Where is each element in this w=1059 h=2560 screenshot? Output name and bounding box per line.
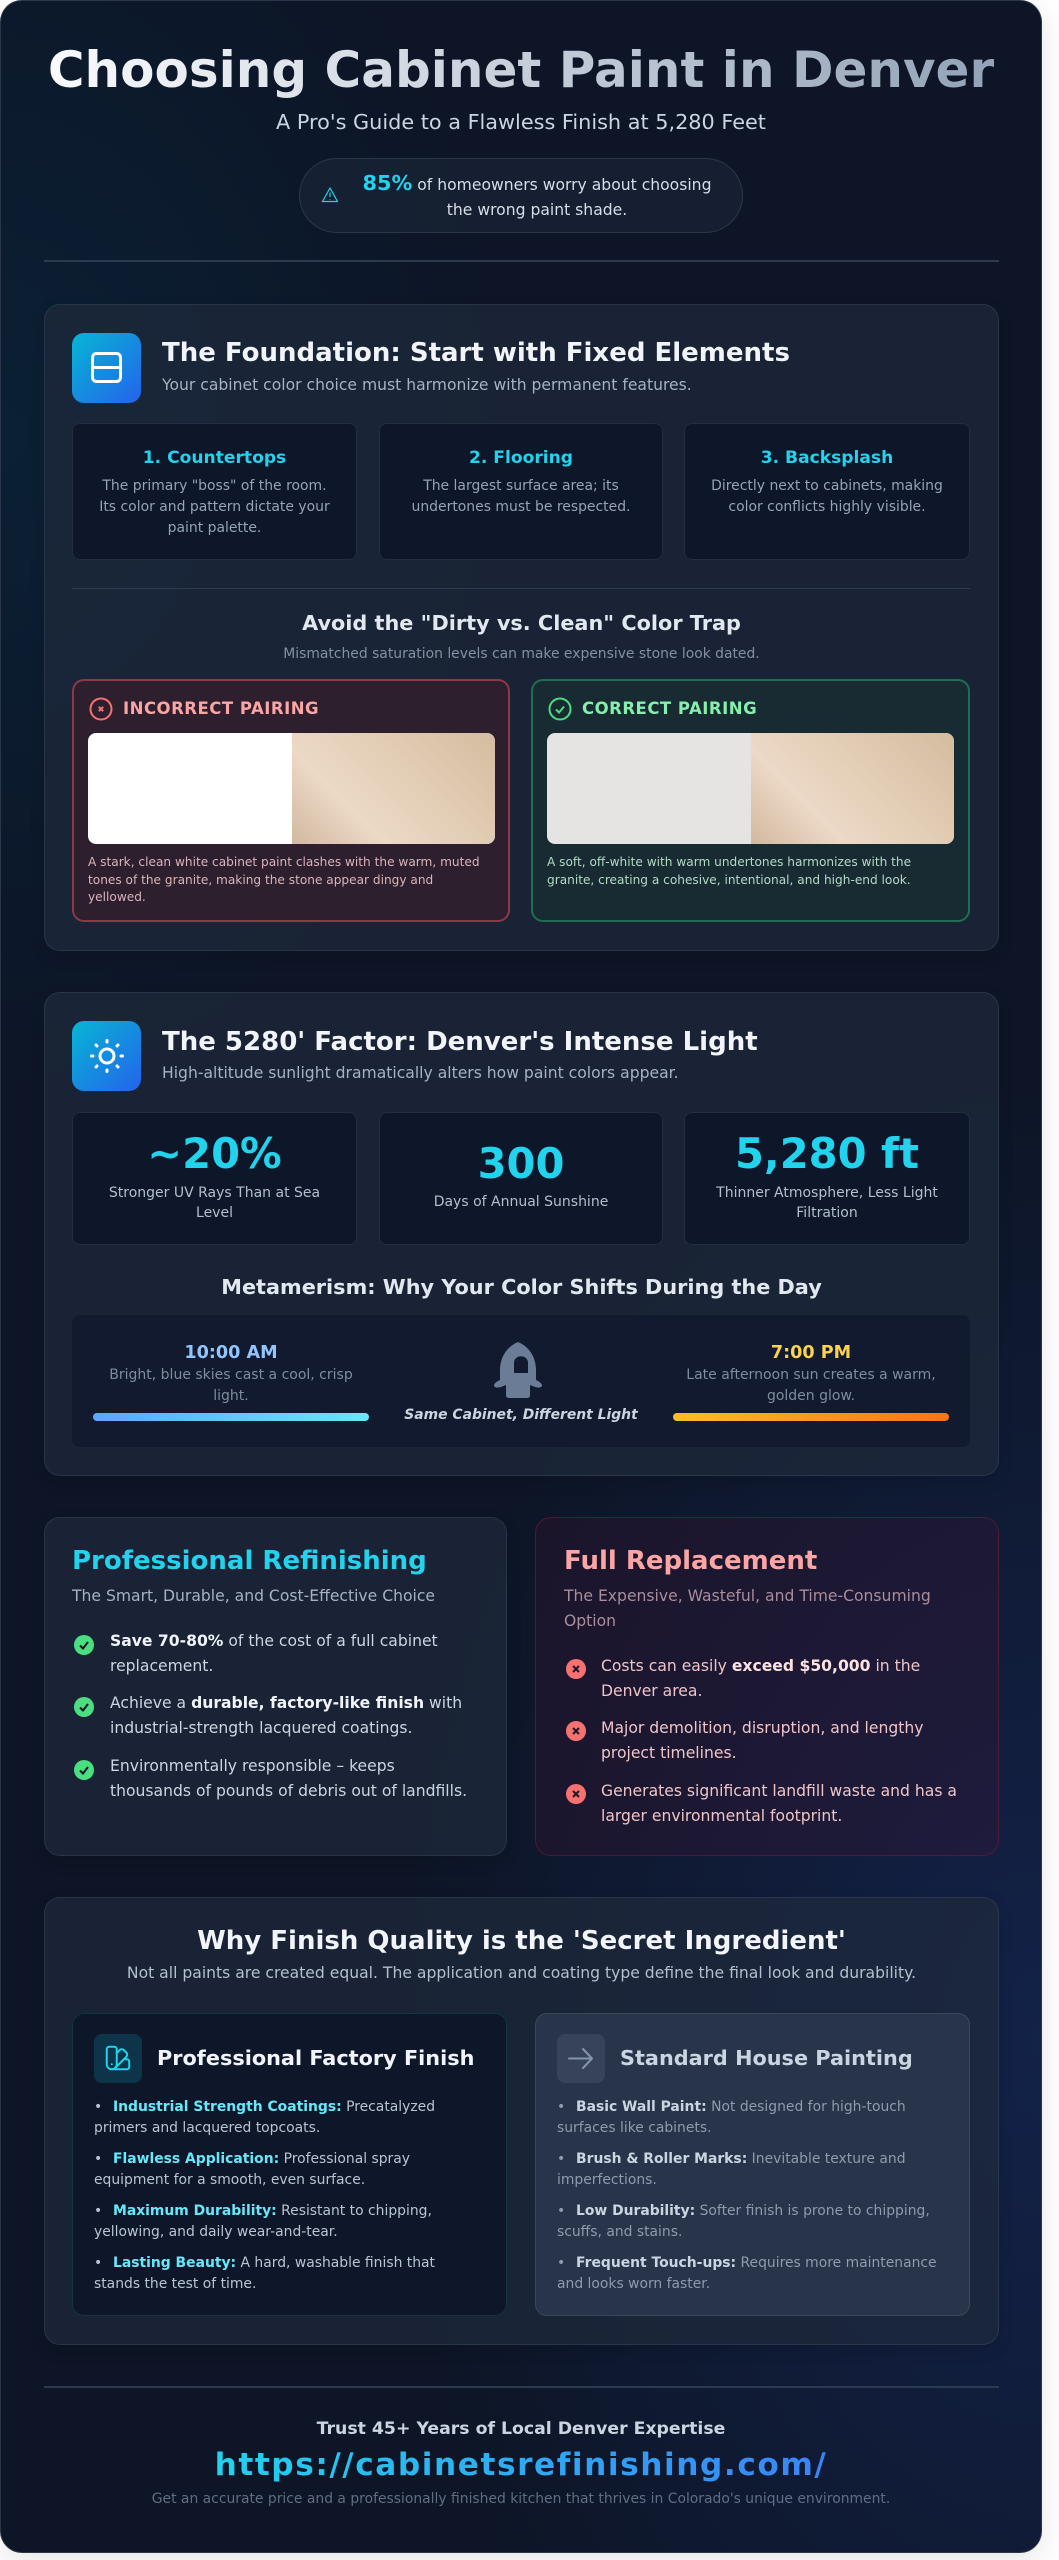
subheading: Not all paints are created equal. The application and coating type define the final look and durability. bbox=[127, 1964, 916, 1982]
label: Stronger UV Rays Than at Sea bbox=[109, 1184, 320, 1200]
title: Choosing Cabinet Paint in Denver bbox=[48, 41, 994, 99]
panel: finish quality bbox=[44, 1897, 999, 2345]
drawback: disruption bbox=[601, 1719, 923, 1762]
list item bbox=[557, 2098, 906, 2136]
card title: 2. Flooring bbox=[469, 448, 573, 468]
bar: cool light bbox=[93, 1413, 369, 1421]
stat: UV bbox=[72, 1112, 357, 1245]
card title: 3. Backsplash bbox=[761, 448, 893, 468]
icon: check bbox=[74, 1760, 94, 1780]
list item bbox=[94, 2202, 432, 2240]
list item: • bbox=[94, 2150, 102, 2166]
list item: • bbox=[94, 2098, 102, 2114]
evening description: Late afternoon sun creates a warm, bbox=[686, 1366, 936, 1382]
description: A stark, clean white cabinet paint clashes with the warm, muted bbox=[88, 855, 480, 869]
list item: Low Durability: Softer finish is prone to chipping, bbox=[576, 2202, 930, 2218]
label: Days of Annual Sunshine bbox=[434, 1194, 608, 1210]
list item: • bbox=[94, 2254, 102, 2270]
card text bbox=[99, 478, 330, 536]
list item: and looks worn faster. bbox=[557, 2276, 710, 2292]
list item bbox=[94, 2254, 435, 2292]
footer: trust line: Trust 45+ Years of Local Denver Expertise bbox=[317, 2419, 725, 2439]
list item: scuffs, and stains. bbox=[557, 2224, 682, 2240]
list item: Lasting Beauty: A hard, washable finish that bbox=[113, 2254, 435, 2270]
benefit: savings: replacement. bbox=[110, 1656, 213, 1674]
icon: check bbox=[74, 1697, 94, 1717]
icon: check circle bbox=[548, 698, 572, 720]
title: Standard House Painting bbox=[620, 2046, 913, 2070]
stat text bbox=[363, 171, 711, 219]
card text: The primary "boss" of the room. bbox=[102, 478, 327, 494]
icon: cabinet bbox=[72, 333, 141, 403]
card text: paint palette. bbox=[168, 520, 261, 536]
subheading bbox=[564, 1587, 931, 1630]
subheading: High-altitude sunlight dramatically alters how paint colors appear. bbox=[162, 1064, 679, 1082]
list item: • bbox=[557, 2150, 565, 2166]
list item: • bbox=[557, 2098, 565, 2114]
benefit: environment bbox=[110, 1757, 467, 1800]
evening description bbox=[686, 1366, 936, 1404]
label: Level bbox=[196, 1205, 233, 1221]
number: 300 bbox=[478, 1139, 564, 1188]
list item: equipment for a smooth, even surface. bbox=[94, 2172, 365, 2188]
icon: warning triangle bbox=[322, 187, 338, 202]
list item: Industrial Strength Coatings: Precatalyzed bbox=[113, 2098, 435, 2114]
label: Thinner Atmosphere, Less Light bbox=[716, 1184, 938, 1200]
list item: stands the test of time. bbox=[94, 2276, 256, 2292]
list item: imperfections. bbox=[557, 2172, 657, 2188]
heading: Why Finish Quality is the 'Secret Ingredient' bbox=[197, 1926, 846, 1956]
drawback: waste bbox=[601, 1782, 957, 1824]
bar: warm light bbox=[673, 1413, 949, 1421]
time label: morning: 10:00 AM bbox=[184, 1343, 278, 1363]
swatch comparison bbox=[547, 733, 954, 844]
benefit: durability: industrial-strength lacquered coatings. bbox=[110, 1718, 412, 1736]
heading: metamerism: Metamerism: Why Your Color Shifts During the Day bbox=[221, 1275, 822, 1299]
list item bbox=[94, 2098, 435, 2136]
card: flooring bbox=[379, 423, 663, 560]
list item: Flawless Application: Professional spray bbox=[113, 2150, 410, 2166]
panel: professional refinishing bbox=[44, 1517, 507, 1856]
description bbox=[88, 855, 480, 904]
subheading: The Smart, Durable, and Cost-Effective Choice bbox=[72, 1587, 435, 1605]
drawback: waste: Generates significant landfill waste and has a bbox=[601, 1782, 957, 1800]
heading: The 5280' Factor: Denver's Intense Light bbox=[162, 1027, 758, 1057]
card text: The largest surface area; its bbox=[423, 478, 619, 494]
swatch comparison bbox=[88, 733, 495, 844]
heading: Professional Refinishing bbox=[72, 1546, 427, 1576]
list item bbox=[557, 2150, 906, 2188]
list item bbox=[557, 2254, 937, 2292]
heading: Full Replacement bbox=[564, 1546, 817, 1576]
morning description: Bright, blue skies cast a cool, crisp bbox=[109, 1366, 353, 1382]
list item: Brush & Roller Marks: Inevitable texture and bbox=[576, 2150, 906, 2166]
list item: • bbox=[557, 2202, 565, 2218]
list item bbox=[557, 2202, 930, 2240]
list item: Maximum Durability: Resistant to chipping, bbox=[113, 2202, 432, 2218]
card: countertops bbox=[72, 423, 357, 560]
card title: 1. Countertops bbox=[143, 448, 286, 468]
panel: factory finish bbox=[72, 2013, 507, 2316]
subheading: The Expensive, Wasteful, and Time-Consuming bbox=[564, 1587, 931, 1605]
card text: Directly next to cabinets, making bbox=[711, 478, 943, 494]
panel: day comparison bbox=[72, 1315, 970, 1447]
benefit: durability bbox=[110, 1694, 462, 1736]
stat text: the wrong paint shade. bbox=[447, 201, 627, 219]
list item: • bbox=[557, 2254, 565, 2270]
benefit: savings bbox=[110, 1632, 438, 1674]
heading: color trap: Avoid the "Dirty vs. Clean" Color Trap bbox=[302, 611, 741, 635]
subheading: color trap: Mismatched saturation levels can make expensive stone look dated. bbox=[283, 646, 760, 662]
drawback: disruption: project timelines. bbox=[601, 1744, 737, 1762]
morning description bbox=[109, 1366, 353, 1404]
stat: altitude bbox=[684, 1112, 970, 1245]
stat: sunshine bbox=[379, 1112, 663, 1245]
card text: undertones must be respected. bbox=[412, 499, 630, 515]
icon: check bbox=[74, 1635, 94, 1655]
evening description: golden glow. bbox=[767, 1388, 855, 1404]
list item: surfaces like cabinets. bbox=[557, 2120, 712, 2136]
heading: The Foundation: Start with Fixed Elements bbox=[162, 338, 790, 368]
description: A soft, off-white with warm undertones harmonizes with the bbox=[547, 855, 911, 869]
icon: cabinet silhouette bbox=[494, 1342, 542, 1398]
label: INCORRECT PAIRING bbox=[123, 699, 319, 718]
description: granite, creating a cohesive, intentional, and high-end look. bbox=[547, 872, 911, 886]
subheading: Your cabinet color choice must harmonize with permanent features. bbox=[162, 376, 692, 394]
list item: yellowing, and daily wear-and-tear. bbox=[94, 2224, 338, 2240]
icon: arrow bbox=[557, 2034, 605, 2083]
list item: Frequent Touch-ups: Requires more maintenance bbox=[576, 2254, 937, 2270]
drawback: cost: Costs can easily exceed $50,000 in the bbox=[601, 1657, 920, 1675]
drawback: cost bbox=[601, 1657, 920, 1700]
card text: Its color and pattern dictate your bbox=[99, 499, 330, 515]
time label: evening: 7:00 PM bbox=[771, 1343, 851, 1363]
subtitle: A Pro's Guide to a Flawless Finish at 5,280 Feet bbox=[276, 110, 766, 134]
stat text: 85% of homeowners worry about choosing bbox=[363, 171, 711, 195]
card text: color conflicts highly visible. bbox=[728, 499, 926, 515]
benefit: environment: Environmentally responsible – keeps bbox=[110, 1757, 395, 1775]
panel: house painting bbox=[535, 2013, 970, 2316]
description bbox=[547, 855, 911, 886]
icon: x bbox=[566, 1784, 586, 1804]
drawback: cost: Denver area. bbox=[601, 1682, 702, 1700]
panel: the foundation bbox=[44, 304, 999, 951]
icon: x bbox=[566, 1721, 586, 1741]
icon: x bbox=[566, 1659, 586, 1679]
label bbox=[109, 1184, 320, 1221]
footer: url: https://cabinetsrefinishing.com/ bbox=[215, 2447, 827, 2483]
subheading: Option bbox=[564, 1612, 616, 1630]
list item: Basic Wall Paint: Not designed for high-touch bbox=[576, 2098, 906, 2114]
benefit: environment: thousands of pounds of debris out of landfills. bbox=[110, 1782, 467, 1800]
drawback: disruption: Major demolition, disruption, and lengthy bbox=[601, 1719, 923, 1737]
title: Professional Factory Finish bbox=[157, 2046, 474, 2070]
card text bbox=[711, 478, 943, 515]
footer: closing note: Get an accurate price and a professionally finished kitchen that thrives in Colorado's unique environment. bbox=[152, 2491, 890, 2507]
panel: correct pairing bbox=[531, 679, 970, 922]
description: yellowed. bbox=[88, 890, 146, 904]
label: Filtration bbox=[796, 1205, 858, 1221]
list item bbox=[94, 2150, 410, 2188]
card: backsplash bbox=[684, 423, 970, 560]
number: ~20% bbox=[147, 1129, 282, 1178]
icon: x circle bbox=[90, 698, 112, 720]
label bbox=[716, 1184, 938, 1221]
benefit: durability: Achieve a durable, factory-like finish with bbox=[110, 1694, 462, 1712]
caption: Same Cabinet, Different Light bbox=[404, 1407, 638, 1423]
panel: full replacement bbox=[535, 1517, 999, 1856]
list item: • bbox=[94, 2202, 102, 2218]
benefit: savings: Save 70-80% of the cost of a full cabinet bbox=[110, 1632, 438, 1650]
panel: the 5280 factor bbox=[44, 992, 999, 1476]
callout: 85% stat pill bbox=[299, 158, 743, 233]
panel: incorrect pairing bbox=[72, 679, 510, 922]
number: 5,280 ft bbox=[735, 1129, 919, 1178]
morning description: light. bbox=[213, 1388, 249, 1404]
icon: swatch book bbox=[94, 2034, 142, 2083]
label: CORRECT PAIRING bbox=[582, 699, 757, 718]
icon: sun bbox=[72, 1021, 141, 1091]
list item: primers and lacquered topcoats. bbox=[94, 2120, 320, 2136]
drawback: waste: larger environmental footprint. bbox=[601, 1806, 842, 1824]
card text bbox=[412, 478, 630, 515]
description: tones of the granite, making the stone appear dingy and bbox=[88, 872, 433, 886]
